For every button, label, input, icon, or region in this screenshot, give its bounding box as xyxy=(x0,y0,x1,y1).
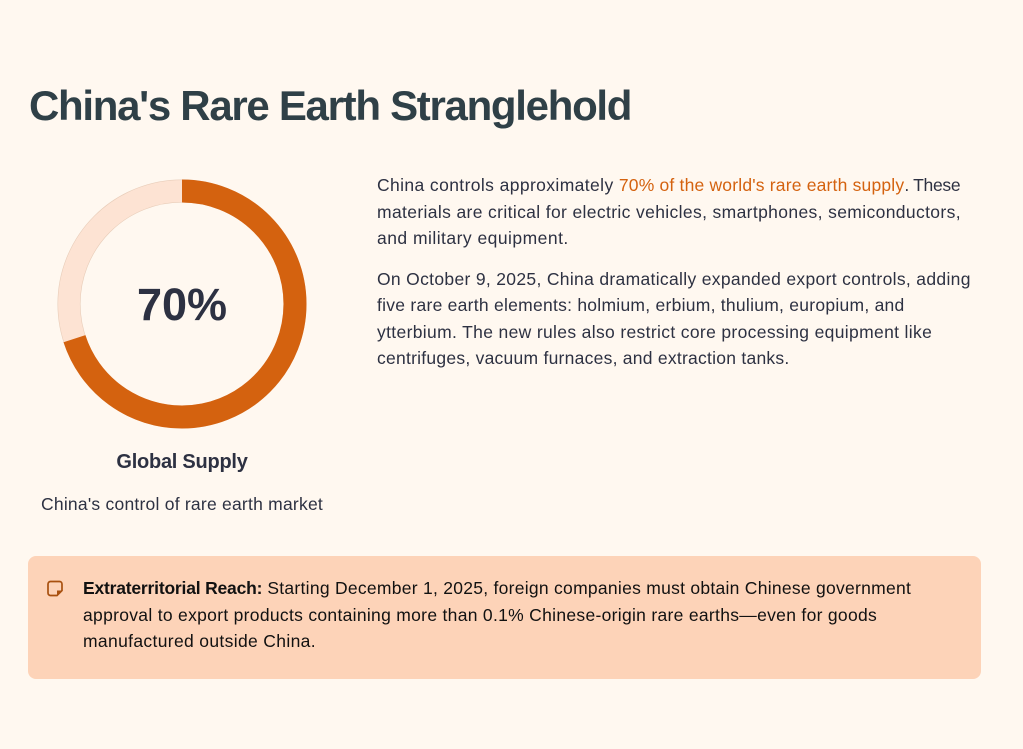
donut caption: China's control of rare earth market xyxy=(41,494,323,514)
text block: export controls paragraph xyxy=(377,269,971,368)
donut chart: 70% global supply: 70% xyxy=(137,279,227,330)
callout text xyxy=(83,578,911,651)
text block: export controls paragraph: centrifuges, vacuum furnaces, and extraction tanks. xyxy=(377,348,790,368)
callout text: Extraterritorial Reach: Starting December 1, 2025, foreign companies must obtain Chinese government xyxy=(83,578,911,598)
text block: supply paragraph xyxy=(377,175,961,248)
icon: sticky note xyxy=(47,580,63,596)
text block: supply paragraph: China controls approximately 70% of the world's rare earth supply. These xyxy=(377,175,960,195)
donut label: Global Supply: Global Supply xyxy=(116,451,248,473)
title: China's Rare Earth Stranglehold xyxy=(29,82,631,129)
text block: export controls paragraph: five rare earth elements: holmium, erbium, thulium, europium, and xyxy=(377,295,905,315)
callout: extraterritorial reach xyxy=(28,556,981,679)
text block: export controls paragraph: ytterbium. The new rules also restrict core processing equipment like xyxy=(377,322,932,342)
text block: export controls paragraph: On October 9, 2025, China dramatically expanded export controls, adding xyxy=(377,269,971,289)
donut chart: 70% global supply xyxy=(58,180,306,428)
text block: supply paragraph: and military equipment. xyxy=(377,228,569,248)
text block: supply paragraph: materials are critical for electric vehicles, smartphones, semiconductors, xyxy=(377,202,961,222)
callout text: manufactured outside China. xyxy=(83,631,316,651)
callout text: approval to export products containing more than 0.1% Chinese-origin rare earths—even for goods xyxy=(83,605,877,625)
